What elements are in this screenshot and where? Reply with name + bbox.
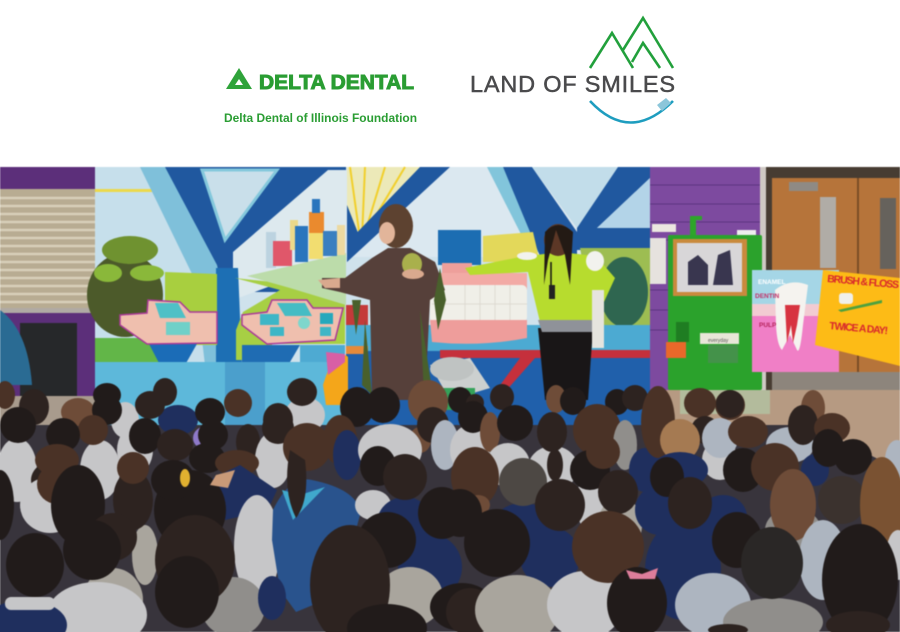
mural backdrop xyxy=(95,167,650,425)
poster: tooth diagram: ENAMEL xyxy=(758,279,785,286)
poster: brush and floss: TWICE A DAY! xyxy=(829,320,889,337)
poster: tooth diagram xyxy=(752,270,839,372)
wordmark: Delta Dental: DELTA DENTAL xyxy=(259,72,414,94)
floor xyxy=(0,390,900,632)
audience: back row xyxy=(0,378,825,438)
doors xyxy=(766,167,900,392)
poster: tooth diagram: PULP xyxy=(759,322,777,329)
green dental machine xyxy=(650,216,762,390)
logo: Delta Dental xyxy=(224,68,417,125)
poster: tooth diagram: DENTIN xyxy=(755,293,780,300)
photo: school assembly xyxy=(0,167,900,632)
poster: brush and floss xyxy=(815,270,900,366)
icon: smile toothbrush xyxy=(590,98,673,122)
green dental machine: everyday xyxy=(708,338,729,344)
foundation name: Delta Dental of Illinois Foundation xyxy=(224,113,417,125)
performer: woman in lime top xyxy=(465,224,615,400)
left wall xyxy=(0,167,96,407)
performer: tooth-decay costume xyxy=(318,204,446,400)
giant teeth prop xyxy=(430,230,527,344)
audience: front rows xyxy=(0,477,898,632)
audience: third row xyxy=(0,423,900,612)
icon: mountains xyxy=(590,18,673,68)
mural: tree xyxy=(87,236,164,337)
right wall xyxy=(650,167,766,392)
wordmark: Land of Smiles: LAND OF SMILES xyxy=(470,71,675,97)
poster: brush and floss: BRUSH & FLOSS xyxy=(827,273,900,291)
icon: delta triangle xyxy=(226,68,252,89)
mural: control consoles xyxy=(120,300,343,344)
exit sign: EXIT xyxy=(739,235,755,242)
exit sign xyxy=(737,230,756,243)
machine poster xyxy=(673,239,747,296)
audience: second row xyxy=(0,386,900,502)
mural: skyline xyxy=(266,199,345,268)
logo: Land of Smiles xyxy=(470,18,675,122)
